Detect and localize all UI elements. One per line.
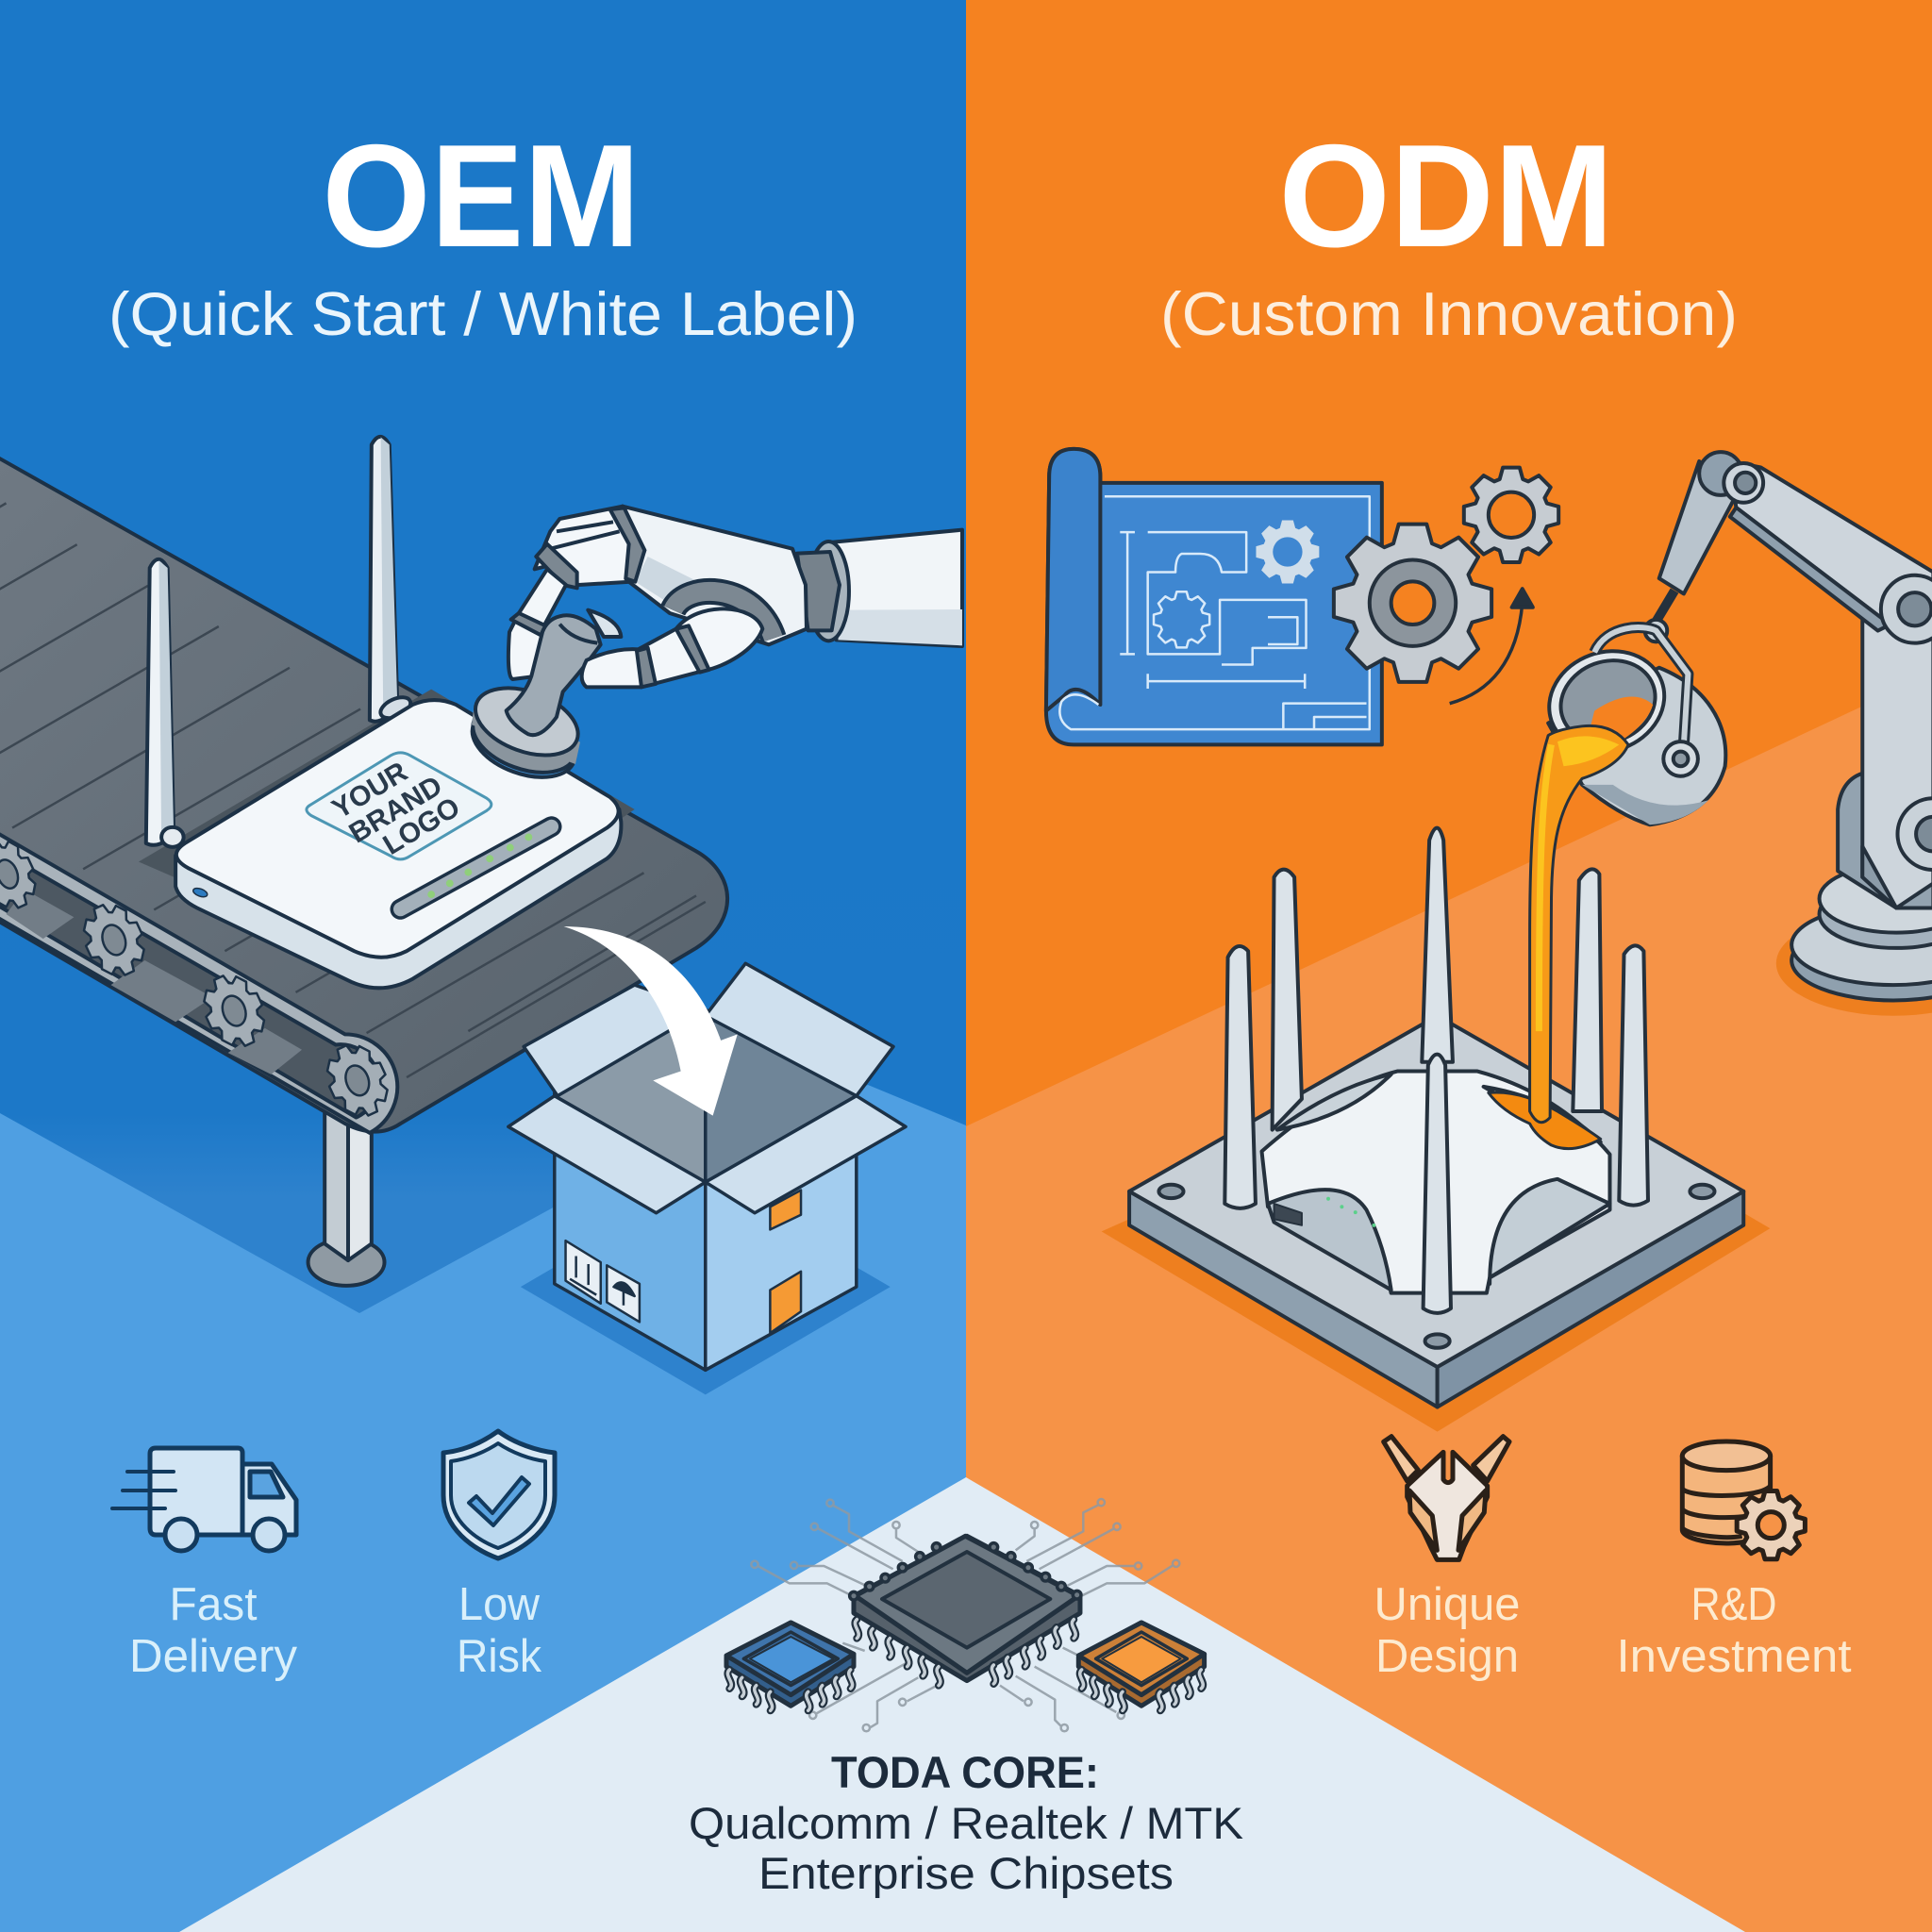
label: R&D investment: Investment	[1617, 1631, 1852, 1682]
handling labels	[566, 1241, 640, 1322]
ladle	[1535, 627, 1725, 824]
LED bar	[401, 826, 552, 909]
label: low risk	[457, 1579, 541, 1682]
logo badge: YOUR	[327, 756, 413, 825]
shadows	[1102, 911, 1932, 1432]
text: chipset brands: Qualcomm / Realtek / MTK	[689, 1798, 1243, 1848]
label: R&D investment	[1617, 1579, 1852, 1682]
conveyor leg	[308, 1105, 385, 1286]
box interior	[555, 1009, 857, 1182]
router with brand logo	[139, 437, 635, 988]
illustration: robotic hand stamping logo	[463, 507, 962, 790]
title: OEM: OEM	[323, 114, 640, 277]
illustration: ODM mould and robot	[1046, 449, 1932, 1432]
arrow: rotation	[1450, 589, 1533, 704]
arrow: into box	[564, 926, 738, 1116]
conveyor belt	[0, 457, 727, 1133]
title: ODM: ODM	[1279, 114, 1613, 277]
label: unique design: Unique	[1374, 1579, 1521, 1630]
heading: Toda core: TODA CORE:	[831, 1747, 1099, 1797]
label: low risk: Low	[458, 1579, 541, 1630]
logo badge: LOGO	[378, 791, 465, 861]
back antennas	[1273, 828, 1602, 1130]
icon: delivery truck	[112, 1448, 296, 1551]
stamp	[463, 615, 601, 790]
chip: orange	[1078, 1623, 1205, 1710]
gears	[1334, 468, 1558, 682]
router body	[175, 809, 621, 988]
logo badge: BRAND	[344, 770, 448, 849]
subtitle: OEM: (Quick Start / White Label)	[108, 279, 858, 348]
illustration: OEM production line	[0, 437, 727, 1286]
label: R&D investment: R&D	[1690, 1579, 1777, 1630]
molten stream	[1489, 725, 1628, 1149]
panel: OEM background	[0, 0, 966, 1932]
mould plate	[1129, 1016, 1743, 1407]
label: fast delivery: Fast	[170, 1579, 258, 1630]
label: unique design: Design	[1375, 1631, 1519, 1682]
label: low risk: Risk	[457, 1631, 541, 1682]
illustration: cardboard box	[508, 926, 906, 1394]
router dome	[1261, 1072, 1609, 1293]
label: unique design	[1374, 1579, 1521, 1682]
robot arm	[797, 530, 962, 646]
panel: ODM background	[966, 0, 1932, 1932]
packing tape	[770, 1191, 801, 1333]
robot arm	[1645, 452, 1932, 1000]
icon: R&D database and gear	[1682, 1441, 1805, 1559]
fingers	[508, 507, 644, 679]
label: fast delivery: Delivery	[129, 1631, 297, 1682]
text: enterprise chipsets: Enterprise Chipsets	[758, 1848, 1174, 1898]
roller gears	[0, 831, 398, 1125]
label: fast delivery	[129, 1579, 297, 1682]
antenna: left	[146, 559, 184, 847]
illustration: chipsets	[726, 1499, 1205, 1731]
front antennas	[1224, 945, 1648, 1313]
chip: main	[850, 1536, 1081, 1686]
icon: shield	[443, 1431, 555, 1558]
thumb	[582, 591, 774, 687]
subtitle: ODM: (Custom Innovation)	[1160, 279, 1738, 348]
panel: core triangle	[179, 1477, 1745, 1932]
blueprint	[1046, 449, 1382, 744]
logo badge	[307, 753, 491, 861]
chip: blue	[726, 1623, 854, 1710]
circuit traces	[751, 1499, 1179, 1731]
box flaps	[508, 963, 906, 1213]
antenna: back	[370, 437, 414, 723]
palm	[623, 507, 807, 644]
icon: unique design mask	[1384, 1437, 1509, 1559]
